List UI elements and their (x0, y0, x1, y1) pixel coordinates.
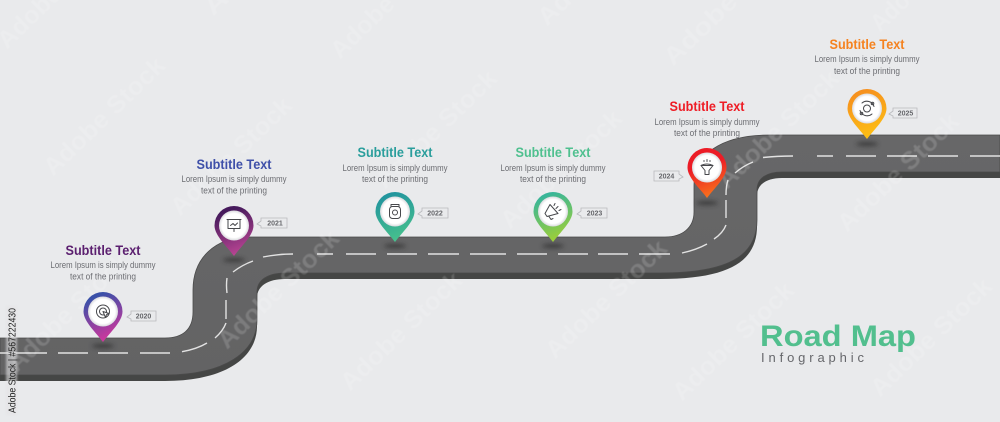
step 2022 (342, 145, 448, 248)
description 2024: Lorem Ipsum is simply dummy (654, 117, 760, 127)
step 2025 (814, 37, 920, 146)
watermarks: Adobe Stock (2, 247, 135, 377)
heading 2022: Subtitle Text (358, 145, 433, 160)
description 2021 (182, 174, 287, 196)
watermarks: Adobe Stock (667, 276, 800, 406)
watermarks: Adobe Stock (495, 104, 628, 234)
year tag 2024: 2024 (659, 174, 674, 180)
road centre dashes (0, 156, 1000, 353)
pin shadow 2023 (542, 244, 564, 248)
description 2020: Lorem Ipsum is simply dummy (50, 260, 156, 270)
description 2021: text of the printing (201, 186, 267, 196)
description 2022: text of the printing (362, 174, 428, 184)
description 2025: Lorem Ipsum is simply dummy (814, 54, 920, 64)
description 2024 (654, 117, 760, 138)
watermarks: Adobe Stock (335, 266, 468, 396)
watermarks: Adobe Stock (865, 272, 998, 402)
heading 2025: Subtitle Text (830, 37, 905, 52)
watermarks: Adobe Stock (212, 224, 345, 354)
description 2022 (342, 163, 448, 184)
step 2024 (654, 99, 760, 206)
year tag 2021: 2021 (267, 220, 283, 228)
heading 2024: Subtitle Text (670, 99, 745, 114)
pin 2024 with funnel icon (688, 148, 726, 198)
watermarks: Adobe Stock (540, 234, 673, 364)
heading 2020: Subtitle Text (66, 243, 141, 258)
description 2024: text of the printing (674, 128, 740, 138)
description 2023: text of the printing (520, 174, 586, 184)
pin 2022 with gear lock icon (376, 192, 414, 242)
year tag 2022: 2022 (427, 210, 443, 218)
year tag 2025: 2025 (898, 110, 913, 118)
pin 2021 with presentation board icon (214, 206, 254, 256)
step 2023 (500, 145, 607, 248)
pin shadow 2025 (856, 142, 878, 146)
description 2025: text of the printing (834, 66, 900, 76)
description 2025 (814, 54, 920, 76)
step 2020 (50, 243, 156, 348)
description 2020 (50, 260, 156, 282)
watermarks: Adobe Stock (712, 64, 845, 194)
step 2021 (182, 157, 287, 262)
stock credit: Adobe Stock | #567222430 (6, 308, 18, 413)
year tag 2023: 2023 (587, 210, 602, 218)
watermarks: Adobe Stock (165, 91, 298, 221)
heading 2023: Subtitle Text (516, 145, 591, 160)
description 2020: text of the printing (70, 272, 136, 282)
pin 2025 with orbit icon (848, 89, 886, 139)
pin shadow 2024 (696, 200, 718, 206)
description 2023: Lorem Ipsum is simply dummy (500, 163, 606, 173)
pin shadow 2022 (384, 244, 406, 248)
road side shadow (0, 141, 1000, 381)
pin shadow 2020 (92, 344, 114, 348)
description 2021: Lorem Ipsum is simply dummy (182, 174, 287, 184)
subtitle: Infographic: Infographic (761, 350, 864, 365)
road (0, 135, 1000, 381)
pin shadow 2021 (223, 258, 245, 262)
heading 2021: Subtitle Text (196, 157, 272, 172)
watermarks: Adobe Stock (38, 51, 171, 181)
pin 2020 with target cursor icon (84, 292, 122, 342)
year tag 2020: 2020 (136, 314, 151, 320)
watermarks: Adobe Stock (370, 64, 503, 194)
watermarks: Adobe Stock (832, 107, 965, 237)
road surface (0, 135, 1000, 375)
pin 2023 with megaphone icon (534, 192, 572, 242)
description 2023 (500, 163, 606, 184)
description 2022: Lorem Ipsum is simply dummy (342, 163, 448, 173)
title: Road Map: Road Map (760, 320, 916, 353)
